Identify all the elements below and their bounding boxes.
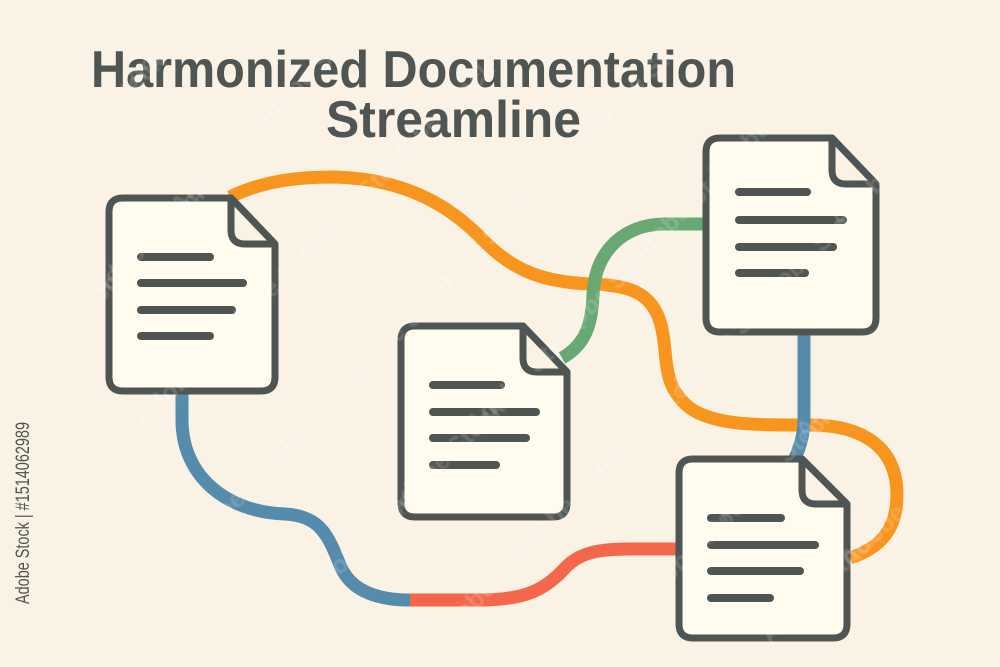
watermark: repeated diagonal stock text: Adobe Stock [300, 476, 431, 604]
title: Harmonized Documentation [91, 41, 736, 99]
watermark: repeated diagonal stock text: Adobe Stock [745, 189, 876, 317]
watermark: repeated diagonal stock text: Adobe Stock [700, 61, 831, 189]
watermark: repeated diagonal stock text: Adobe Stock [245, 9, 376, 137]
watermark: repeated diagonal stock text: Adobe Stock [585, 355, 716, 483]
watermark: repeated diagonal stock text: Adobe Stock [290, 137, 421, 265]
watermark: repeated diagonal stock text: Adobe Stock [620, 144, 751, 272]
watermark: repeated diagonal stock text: Adobe Stock [575, 16, 706, 144]
title [91, 41, 736, 149]
watermark: repeated diagonal stock text: Adobe Stock [755, 521, 886, 649]
connector: blue from left document to bottom [182, 391, 410, 600]
watermark: repeated diagonal stock text: Adobe Stock [255, 348, 386, 476]
watermark: repeated diagonal stock text: Adobe Stock [50, 386, 181, 514]
connector: red to lower right document [410, 549, 678, 600]
watermark: repeated diagonal stock text: Adobe Stock [335, 265, 466, 393]
document: left [109, 198, 275, 391]
watermark: repeated diagonal stock text: Adobe Stock [40, 47, 171, 175]
watermark: repeated diagonal stock text: Adobe Stock [835, 445, 966, 573]
watermark: repeated diagonal stock text: Adobe Stock [495, 99, 626, 227]
watermark: repeated diagonal stock text: Adobe Stock [825, 106, 956, 234]
watermark: repeated diagonal stock text: Adobe Stock [665, 272, 796, 400]
watermark: repeated diagonal stock text: Adobe Stock [210, 220, 341, 348]
watermark: repeated diagonal stock text: Adobe Stock [425, 521, 556, 649]
watermark: repeated diagonal stock text: Adobe Stock [505, 438, 636, 566]
watermark: repeated diagonal stock text: Adobe Stock [165, 92, 296, 220]
watermark: repeated diagonal stock text: Adobe Stock [415, 182, 546, 310]
watermark: repeated diagonal stock text: Adobe Stock [710, 400, 841, 528]
watermark: repeated diagonal stock text: Adobe Stock [630, 483, 761, 611]
watermark: repeated diagonal stock text: Adobe Stock [370, 54, 501, 182]
document: lower right [679, 459, 847, 638]
stock credit: Adobe Stock | #1514062989 [13, 422, 34, 604]
watermark: repeated diagonal stock text: Adobe Stock [380, 393, 511, 521]
connector: orange from left document to lower right document [230, 177, 897, 558]
connector: blue between upper right and lower right documents [795, 332, 804, 458]
watermark: repeated diagonal stock text: Adobe Stock [85, 175, 216, 303]
document: upper right [706, 138, 876, 332]
watermark: repeated diagonal stock text: Adobe Stock [5, 258, 136, 386]
watermark: repeated diagonal stock text: Adobe Stock [460, 310, 591, 438]
title: Streamline [326, 91, 581, 149]
watermark: repeated diagonal stock text: Adobe Stock [540, 227, 671, 355]
connector: green from centre document to upper right document [562, 224, 704, 358]
document: centre [401, 326, 567, 517]
watermark: repeated diagonal stock text: Adobe Stock [175, 431, 306, 559]
watermark: repeated diagonal stock text: Adobe Stock [130, 303, 261, 431]
watermark: repeated diagonal stock text: Adobe Stock [790, 317, 921, 445]
